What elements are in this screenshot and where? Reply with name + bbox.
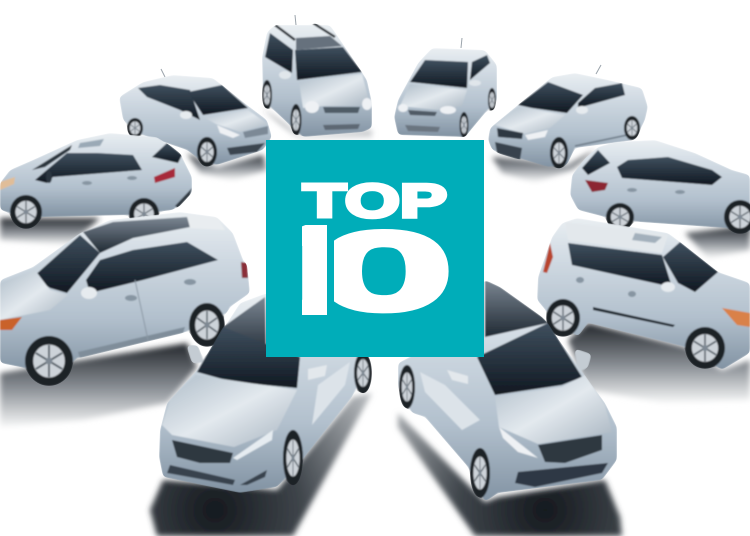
car: large SUV, left [0,212,250,386]
car: boxy hatchback, right [537,218,750,370]
antennas [161,15,601,77]
car: minivan, top centre-left [262,23,372,137]
logo number: 1: 1 [258,200,372,343]
logo word: TOP: TOP [303,174,447,227]
badge: teal square with Top 10 logo [258,140,484,357]
car: sedan, bottom left [159,293,372,493]
car: hatchback, left [0,133,192,230]
car: sedan, top centre-right [394,48,497,138]
car: coupe, upper right [488,73,648,169]
car: sedan, upper left [119,75,272,167]
car: hatchback, right [570,140,750,234]
car: compact SUV, bottom right [398,280,617,502]
logo number: 0: 0 [322,213,446,329]
ground shadows [0,108,750,536]
